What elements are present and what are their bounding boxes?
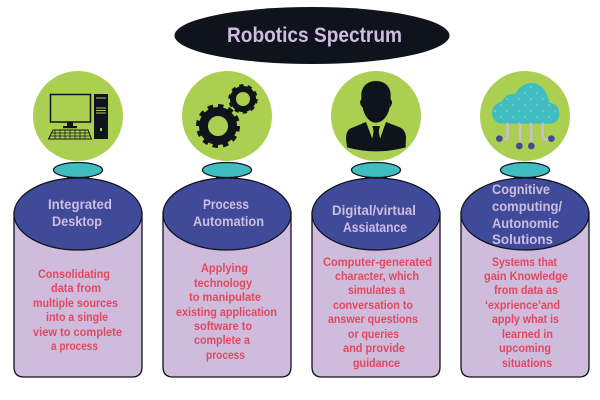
text: integrated desktop description: data from	[51, 281, 101, 295]
heading: cognitive computing: computing/	[492, 198, 562, 214]
text: process automation description: to manipulate	[189, 290, 261, 304]
text: cognitive computing description	[484, 255, 568, 370]
text: integrated desktop description: view to complete	[33, 325, 122, 339]
title: Robotics Spectrum	[227, 24, 402, 47]
heading: process automation	[163, 178, 291, 250]
text: process automation description: Applying	[201, 261, 248, 275]
heading: cognitive computing: Autonomic	[492, 215, 559, 231]
text: digital/virtual assistance description	[323, 255, 432, 370]
heading: digital/virtual assistance	[312, 178, 440, 250]
text: cognitive computing description: learned in	[502, 327, 553, 341]
text: integrated desktop description: multiple sources	[33, 296, 118, 310]
heading: digital/virtual assistance: Assiatance	[343, 219, 407, 235]
heading: integrated desktop	[14, 178, 142, 250]
icon: desktop computer	[33, 71, 123, 161]
text: digital/virtual assistance description: character, which	[335, 269, 419, 283]
text: process automation description: software to	[194, 319, 252, 333]
panel: cognitive computing	[461, 71, 589, 377]
text: digital/virtual assistance description: guidance	[353, 356, 400, 370]
text: cognitive computing description: ‘exprience’and	[485, 298, 560, 312]
text: digital/virtual assistance description: answer questions	[328, 312, 418, 326]
panel: process automation	[163, 71, 291, 377]
text: digital/virtual assistance description: conversation to	[333, 298, 413, 312]
text: integrated desktop description: a process	[51, 339, 98, 353]
panel: digital/virtual assistance	[312, 71, 440, 377]
text: process automation description: existing application	[176, 305, 277, 319]
heading: cognitive computing: Cognitive	[492, 181, 550, 197]
icon: person in suit	[331, 71, 421, 161]
heading: digital/virtual assistance: Digital/virtual	[332, 202, 416, 218]
connector ellipse	[352, 162, 400, 180]
text: integrated desktop description	[33, 267, 122, 353]
text: cognitive computing description: gain Knowledge	[484, 269, 568, 283]
icon: gears	[182, 71, 272, 161]
cylinder body	[14, 212, 142, 377]
panel: integrated desktop	[14, 71, 142, 377]
text: digital/virtual assistance description: and provide	[343, 341, 405, 355]
text: digital/virtual assistance description: simulates a	[348, 283, 405, 297]
text: cognitive computing description: situations	[502, 356, 552, 370]
icon: cloud network	[480, 71, 570, 161]
connector ellipse	[202, 162, 252, 180]
heading: cognitive computing	[461, 178, 589, 250]
heading: integrated desktop: Desktop	[52, 213, 102, 229]
text: integrated desktop description: into a single	[46, 310, 108, 324]
heading: integrated desktop: Integrated	[48, 196, 112, 212]
text: process automation description: process	[206, 348, 245, 362]
cylinder body	[312, 212, 440, 377]
text: integrated desktop description: Consolidating	[38, 267, 110, 281]
heading: process automation: Automation	[193, 213, 264, 229]
heading: cognitive computing: Solutions	[492, 231, 553, 247]
text: cognitive computing description: apply what is	[492, 312, 559, 326]
cylinder body	[163, 212, 291, 377]
title	[174, 7, 450, 64]
connector ellipse	[500, 162, 550, 180]
heading: process automation: Process	[203, 196, 249, 212]
text: cognitive computing description: upcoming	[499, 341, 551, 355]
text: process automation description	[176, 261, 277, 362]
text: cognitive computing description: Systems that	[492, 255, 557, 269]
cylinder body	[461, 212, 589, 377]
text: cognitive computing description: from data as	[494, 283, 558, 297]
text: digital/virtual assistance description: Computer-generated	[323, 255, 432, 269]
connector ellipse	[54, 162, 102, 180]
text: process automation description: complete a	[194, 333, 250, 347]
text: digital/virtual assistance description: or queries	[348, 327, 399, 341]
text: process automation description: technology	[194, 276, 252, 290]
